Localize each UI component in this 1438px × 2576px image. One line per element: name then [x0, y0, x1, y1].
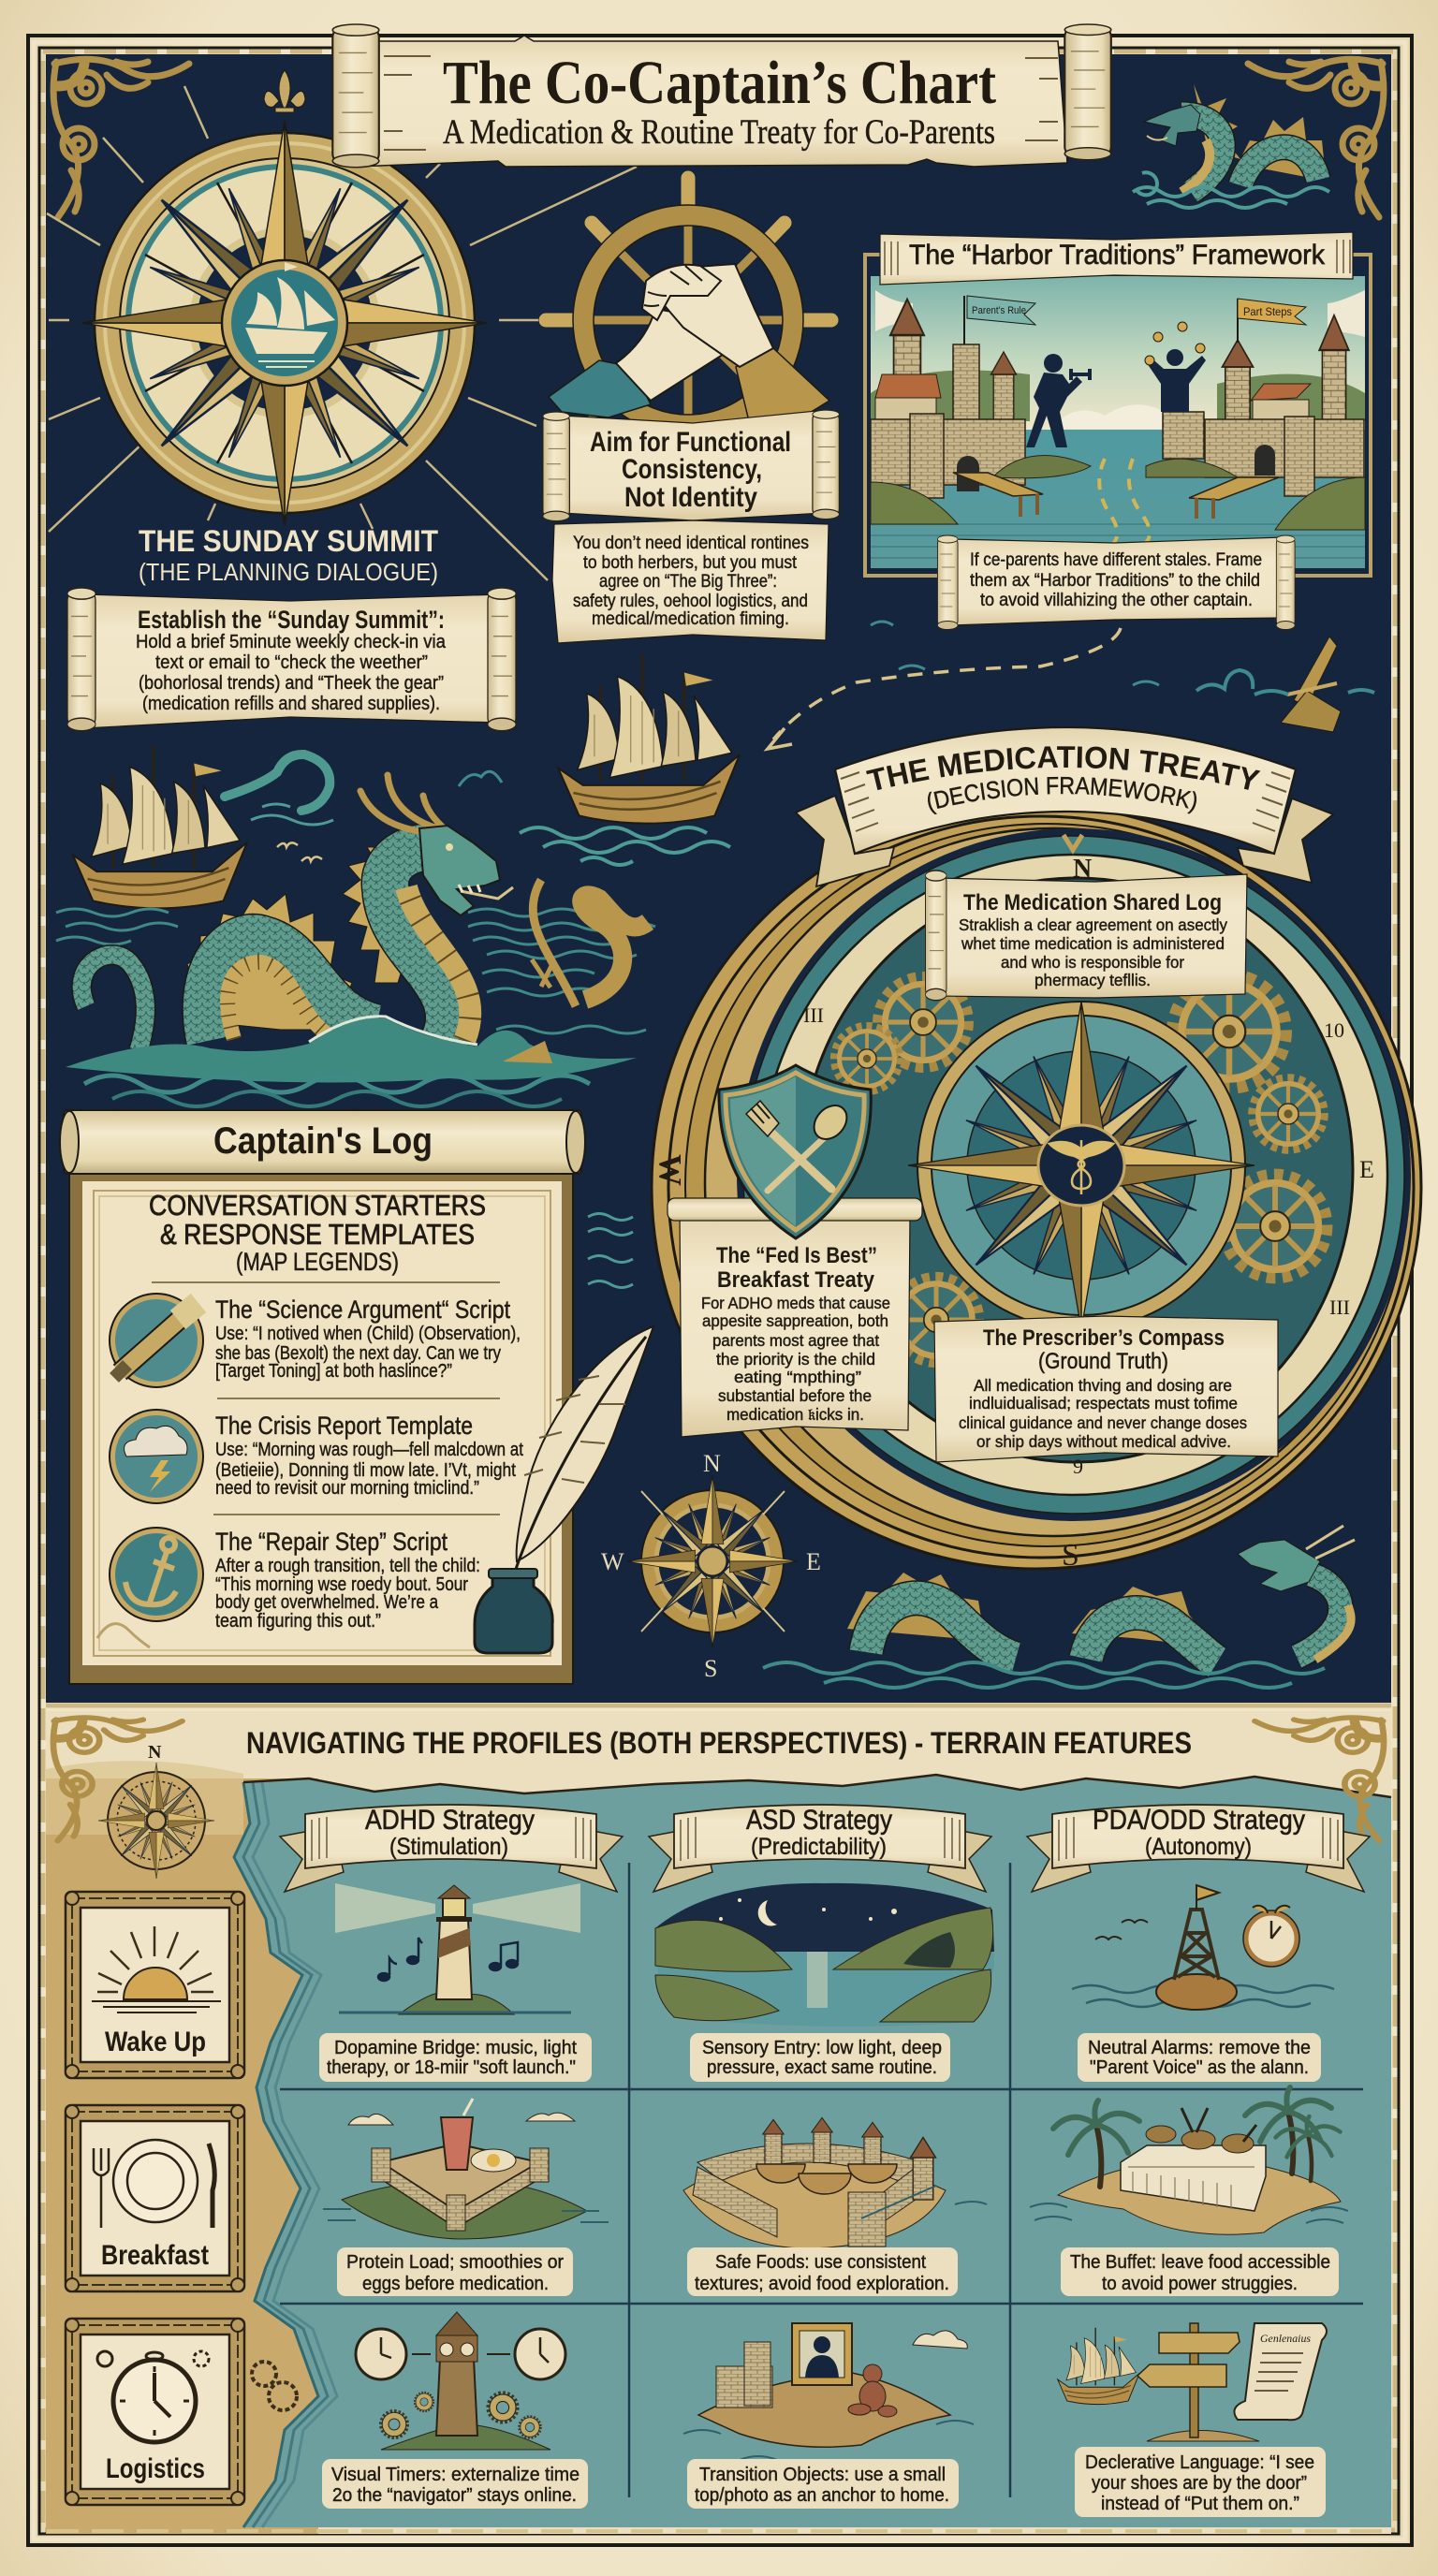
- scroll: Establish the Sunday Summit: Hold a brief 5minute weekly check-in via: [136, 632, 447, 652]
- scroll: Prescriber's Compass: clinical guidance and never change doses: [959, 1413, 1247, 1432]
- compass: Sunday Summit: [82, 121, 487, 525]
- script 3: After a rough transition, tell the child:: [215, 1556, 480, 1576]
- column: PDA/ODD: [1027, 1805, 1370, 1892]
- caption R1C3: "Parent Voice" as the alann.: [1090, 2057, 1309, 2078]
- dial numerals: 9: [1073, 1455, 1083, 1478]
- scroll: Fed Is Best: eating “mpthing”: [734, 1368, 861, 1386]
- docks: [953, 473, 1279, 519]
- juggling figure: [1145, 322, 1206, 412]
- scroll: functional consistency: Aim for Functional: [590, 427, 791, 458]
- icon: clock tower: [356, 2312, 565, 2450]
- log heading: (MAP LEGENDS): [236, 1248, 399, 1276]
- caption scroll: them ax “Harbor Traditions” to the child: [970, 571, 1260, 591]
- arch: [204, 936, 376, 1041]
- scroll: Fed Is Best: Breakfast Treaty: [717, 1267, 875, 1293]
- scroll: Prescriber's Compass: (Ground Truth): [1038, 1349, 1168, 1374]
- top roller: Captain's Log: [213, 1120, 433, 1162]
- waves: background ripples: [56, 909, 655, 1033]
- scroll: Prescriber's Compass: The Prescriber’s Compass: [983, 1325, 1225, 1351]
- small compass: [601, 1450, 821, 1682]
- left castle: Parent’s Rule: [972, 305, 1026, 316]
- scroll: Fed Is Best: the priority is the child: [716, 1350, 875, 1368]
- icon: buffet island: [1030, 2087, 1348, 2234]
- small sail on water: [503, 1041, 552, 1063]
- scroll: Fed Is Best: parents most agree that: [712, 1331, 879, 1350]
- sea serpent bottom right: [763, 1526, 1355, 1688]
- clasped hands: [616, 264, 773, 401]
- scroll: Prescriber's Compass: or ship days without medical advive.: [976, 1432, 1231, 1451]
- heading: The Sunday Summit: (THE PLANNING DIALOGUE): [139, 558, 438, 586]
- caption R3C1: Visual Timers: externalize time: [331, 2465, 580, 2485]
- panel: Navigating the Profiles: [46, 1705, 1391, 2534]
- arch spines: [185, 894, 374, 1030]
- caption R2C1: [337, 2247, 573, 2296]
- scroll: Fed Is Best: substantial before the: [718, 1386, 872, 1405]
- heading: The Sunday Summit: [139, 524, 438, 586]
- column: ADHD: [280, 1805, 623, 1892]
- dial numerals: S: [1062, 1538, 1079, 1573]
- icon: caduceus: [1049, 1140, 1113, 1194]
- sea serpent main: [66, 775, 648, 1106]
- ship: left: [73, 745, 247, 908]
- scroll: Prescriber's Compass: [934, 1316, 1278, 1462]
- caption R2C3: to avoid power struggies.: [1102, 2274, 1298, 2294]
- frame: Breakfast: [66, 2105, 244, 2291]
- script 1: she bas (Bexolt) the next day. Can we try: [215, 1343, 501, 1364]
- panel: Medication Treaty dial: [652, 805, 1421, 1573]
- dial numerals: E: [1359, 1156, 1374, 1183]
- caption R1C1: [319, 2033, 592, 2082]
- caption R3C2: top/photo as an anchor to home.: [695, 2485, 949, 2506]
- scroll: Prescriber's Compass: indluidualisad; respectats must tofime: [969, 1394, 1238, 1412]
- scroll roll right: [1064, 24, 1111, 160]
- dial numerals: III: [1329, 1295, 1350, 1319]
- gears on land: [252, 2362, 297, 2410]
- tentacles: [532, 880, 648, 1006]
- panel title scroll: [880, 232, 1353, 285]
- column: PDA/ODD: PDA/ODD Strategy: [1093, 1805, 1305, 1836]
- scroll: Fed Is Best: medication 𝔨icks in.: [726, 1405, 864, 1424]
- script 2: Use: “Morning was rough—fell malcdown at: [215, 1440, 523, 1460]
- scroll: functional consistency: Not Identity: [624, 482, 757, 513]
- caption scroll: [937, 535, 1295, 629]
- caption R1C1: Dopamine Bridge: music, light: [334, 2038, 577, 2058]
- frame: Logistics: [66, 2319, 244, 2505]
- text box: The Big Three: [552, 520, 829, 643]
- birds: [277, 842, 322, 861]
- waves: under middle ship: [520, 827, 730, 865]
- text box: The Big Three: You don’t need identical rontines: [573, 534, 809, 553]
- icon: island with photo and bear: [683, 2323, 974, 2460]
- caption R3C3: [1075, 2447, 1326, 2517]
- script 3: [215, 1528, 480, 1632]
- compass small: N: [148, 1742, 162, 1763]
- right sleeve: [736, 348, 829, 421]
- scroll: Establish the Sunday Summit: [67, 588, 516, 731]
- left castle: [871, 296, 1035, 524]
- waves: [84, 1076, 590, 1106]
- scroll: Establish the Sunday Summit: (bohorlosal trends) and “Theek the gear”: [139, 673, 444, 694]
- caption R2C3: The Buffet: leave food accessible: [1070, 2252, 1330, 2273]
- right castle: Part Steps: [1243, 305, 1292, 318]
- icon: fort with smoothie: [323, 2099, 609, 2239]
- right castle: [1146, 299, 1365, 530]
- caption R2C2: Safe Foods: use consistent: [715, 2252, 926, 2273]
- main title: The Co-Captain’s Chart: [443, 49, 996, 117]
- script 1: Use: “I notived when (Child) (Observation),: [215, 1324, 521, 1344]
- banner: Medication Treaty: THE MEDICATION TREATY: [866, 746, 1260, 790]
- compass small: [98, 1742, 214, 1879]
- icon: rising sun: [92, 1926, 221, 2012]
- script 1: [215, 1295, 521, 1382]
- scroll: Medication Shared Log: phermacy tefllis.: [1034, 971, 1151, 989]
- neck spines: [343, 847, 412, 983]
- navy sea panel: [46, 54, 1391, 1703]
- text box: The Big Three: agree on “The Big Three”:: [599, 572, 777, 592]
- frame: Wake Up: [66, 1892, 244, 2078]
- script 1: [Target Toning] at both haslince?”: [215, 1361, 452, 1382]
- scroll: Fed Is Best: appesite sappreation, both: [702, 1311, 888, 1330]
- script 1: The “Science Argument“ Script: [215, 1295, 510, 1324]
- scroll: Medication Shared Log: whet time medication is administered: [961, 934, 1225, 953]
- icon: shield with fork and spoon: [719, 1065, 871, 1238]
- right flag: [1238, 299, 1306, 325]
- scroll: Prescriber's Compass: All medication thving and dosing are: [974, 1376, 1232, 1395]
- column: ASD: (Predictability): [751, 1834, 887, 1860]
- caption scroll: If ce-parents have different stales. Frame: [970, 550, 1262, 570]
- scroll: Fed Is Best: The “Fed Is Best”: [716, 1243, 877, 1268]
- script 2: [215, 1412, 523, 1499]
- caption R3C1: 2o the “navigator” stays online.: [332, 2485, 577, 2506]
- icon: fleur-de-lis: [264, 70, 305, 112]
- caption R2C1: Protein Load; smoothies or: [346, 2252, 564, 2273]
- column: PDA/ODD: (Autonomy): [1145, 1834, 1252, 1860]
- icon: ship in medallion: [245, 262, 335, 367]
- heading: NAVIGATING THE PROFILES (BOTH PERSPECTIVES) - TERRAIN FEATURES: [246, 1726, 1192, 1760]
- icon: anchor: [110, 1528, 203, 1621]
- panel title scroll: The “Harbor Traditions” Framework: [909, 240, 1326, 271]
- scroll: Establish the Sunday Summit: text or email to “check the weether”: [155, 652, 428, 673]
- caption R1C1: therapy, or 18-miir "soft launch.": [327, 2057, 576, 2078]
- left rock and figure: [992, 455, 1091, 478]
- frame: Logistics: Logistics: [106, 2453, 205, 2484]
- scroll: Medication Shared Log: The Medication Shared Log: [963, 890, 1222, 915]
- caption R3C3: Declerative Language: “I see: [1085, 2452, 1314, 2473]
- caption R3C3: instead of “Put them on.”: [1101, 2494, 1299, 2514]
- icon: storm cloud: [110, 1410, 203, 1503]
- neck: [385, 847, 470, 1041]
- script 3: team figuring this out.”: [215, 1611, 381, 1632]
- caption R3C2: Transition Objects: use a small: [699, 2465, 946, 2485]
- gears: [880, 979, 966, 1065]
- left flag: [967, 296, 1035, 325]
- caption R1C2: pressure, exact same routine.: [707, 2057, 937, 2078]
- small compass: S: [704, 1655, 717, 1682]
- icon: ship, signpost and scroll: [1058, 2323, 1327, 2441]
- frame: Wake Up: Wake Up: [105, 2027, 206, 2057]
- icon: ring fort with bowls: [683, 2117, 987, 2248]
- caption R1C2: [690, 2033, 950, 2082]
- left coil: [81, 955, 145, 1050]
- scroll: Fed Is Best: [668, 1198, 922, 1437]
- small compass: N: [703, 1450, 721, 1477]
- corner ornaments top: [53, 59, 1384, 217]
- caption R3C3: your shoes are by the door”: [1092, 2473, 1307, 2494]
- script 2: (Betieiie), Donning tli mow late. I’Vt, might: [215, 1460, 516, 1481]
- small compass: E: [806, 1548, 821, 1575]
- icon: ship, signpost and scroll: Genlenaius: [1260, 2332, 1311, 2345]
- icon: buoy and alarm clock: [1072, 1885, 1334, 2010]
- scroll: Establish the Sunday Summit: (medication refills and shared supplies).: [142, 694, 440, 714]
- scroll: functional consistency: [543, 410, 839, 521]
- sea serpent top right: [1133, 84, 1329, 208]
- scroll: functional consistency: Consistency,: [622, 454, 762, 485]
- scroll: Fed Is Best: For ADHO meds that cause: [701, 1294, 890, 1312]
- frame: Breakfast: Breakfast: [101, 2240, 209, 2271]
- script 2: The Crisis Report Template: [215, 1412, 473, 1440]
- caption scroll: to avoid villahizing the other captain.: [980, 591, 1253, 610]
- log heading: [149, 1189, 486, 1276]
- text box: The Big Three: to both herbers, but you must: [583, 553, 798, 573]
- column: ADHD: (Stimulation): [389, 1834, 508, 1860]
- icon: pocket clock: [97, 2351, 209, 2442]
- scroll: Establish the Sunday Summit: Establish the “Sunday Summit”:: [138, 606, 445, 634]
- bottom ruler: [47, 2529, 1391, 2533]
- corner ornaments bottom panel: [53, 1718, 1384, 1841]
- dial numerals: III: [803, 1003, 824, 1027]
- scroll: Medication Shared Log: and who is responsible for: [1001, 953, 1184, 972]
- column: ADHD: ADHD Strategy: [365, 1805, 535, 1836]
- text box: The Big Three: safety rules, oehool logistics, and: [573, 592, 808, 611]
- caption R2C2: [687, 2247, 958, 2296]
- dial numerals: 10: [1324, 1018, 1344, 1042]
- icon: sinking buoy with waves: [871, 622, 1374, 732]
- panel: Captain's Log: [60, 1110, 585, 1684]
- icon: quill and ink bottle: [475, 1326, 653, 1653]
- icon: ship's wheel with handshake: [546, 178, 831, 449]
- icon: lighthouse: [335, 1883, 580, 2014]
- left sleeve: [549, 360, 651, 417]
- top roller: [60, 1110, 585, 1174]
- title banner: [332, 24, 1111, 168]
- caption R2C1: eggs before medication.: [362, 2274, 549, 2294]
- banner: Medication Treaty: (DECISION FRAMEWORK): [928, 777, 1196, 814]
- dial numerals: W: [653, 1154, 687, 1186]
- script 3: The “Repair Step” Script: [215, 1528, 448, 1556]
- icon: plate and cutlery: [94, 2140, 214, 2228]
- harbor scene: [871, 276, 1365, 568]
- small compass: W: [601, 1548, 624, 1575]
- corner flourish: [97, 1624, 150, 1647]
- inner compass medallion: [908, 1002, 1255, 1329]
- script 3: “This morning wse roedy bout. 5our: [215, 1574, 468, 1595]
- dial numerals: N: [1073, 855, 1092, 884]
- caption R3C2: [687, 2459, 959, 2509]
- column: ASD: ASD Strategy: [746, 1805, 892, 1836]
- grid lines: [280, 1863, 1363, 2497]
- caption R1C3: [1078, 2033, 1321, 2082]
- caption R2C2: textures; avoid food exploration.: [695, 2274, 949, 2294]
- icon: night harbor: [654, 1883, 994, 2027]
- scroll: Medication Shared Log: [925, 871, 1247, 1001]
- icon: spyglass: [110, 1294, 203, 1387]
- scroll: Medication Shared Log: Straklish a clear agreement on asectly: [959, 915, 1227, 934]
- dial numerals: [653, 835, 1374, 1573]
- land: [46, 1778, 318, 2534]
- subtitle: A Medication & Routine Treaty for Co-Parents: [443, 113, 995, 152]
- sea and coastline: [234, 1775, 1391, 2527]
- banner: Medication Treaty: [794, 726, 1335, 887]
- script 2: need to revisit our morning tmiclind.”: [215, 1478, 479, 1499]
- compass rays: [47, 86, 637, 580]
- log heading: CONVERSATION STARTERS: [149, 1189, 486, 1222]
- caption R3C1: [322, 2459, 588, 2509]
- caption R1C2: Sensory Entry: low light, deep: [702, 2038, 942, 2058]
- caption R1C3: Neutral Alarms: remove the: [1088, 2038, 1311, 2058]
- caption R2C3: [1061, 2247, 1339, 2296]
- waves: beside log: [588, 1213, 633, 1288]
- script 3: body get overwhelmed. We’re a: [215, 1592, 439, 1613]
- small serpent loop: [225, 754, 502, 825]
- panel: Harbor Traditions: [865, 232, 1371, 629]
- column: ASD: [649, 1805, 991, 1892]
- wave crest over bodies: [66, 1018, 637, 1082]
- heading: The Sunday Summit: THE SUNDAY SUMMIT: [139, 524, 438, 558]
- dashed arrow: [768, 628, 1121, 749]
- log heading: & RESPONSE TEMPLATES: [160, 1218, 475, 1251]
- head: [360, 775, 513, 915]
- scroll roll left: [332, 24, 379, 168]
- ship: middle: [558, 653, 740, 824]
- text box: The Big Three: medical/medication fiming.: [592, 609, 789, 629]
